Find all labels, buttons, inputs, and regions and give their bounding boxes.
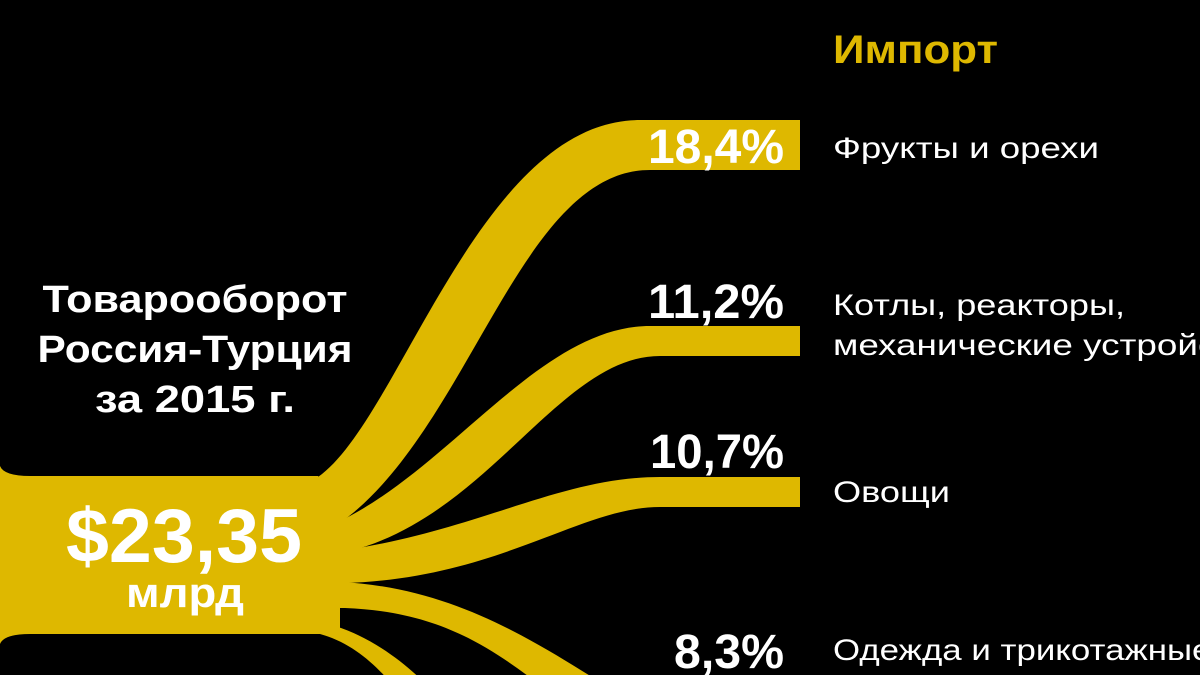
flow: bottom band xyxy=(320,626,440,675)
title text: за 2015 г. xyxy=(95,379,295,421)
flow: clothing xyxy=(330,582,630,675)
total value xyxy=(66,494,302,616)
total value: млрд xyxy=(126,569,244,616)
percentages: 18,4% xyxy=(648,121,784,174)
category labels xyxy=(833,132,1200,667)
category labels: Фрукты и орехи xyxy=(833,132,1099,165)
percentages: 11,2% xyxy=(648,276,784,329)
percentages xyxy=(648,121,784,675)
heading: import: Импорт xyxy=(833,28,998,72)
category labels: Котлы, реакторы, xyxy=(833,289,1125,322)
title text: Товарооборот xyxy=(42,279,348,321)
main trunk bar xyxy=(0,466,340,644)
flow: fruits and nuts xyxy=(318,120,800,523)
percentages: 10,7% xyxy=(650,426,784,479)
category labels: механические устройства xyxy=(833,329,1200,362)
category labels: Овощи xyxy=(833,476,950,509)
flow: vegetables xyxy=(330,477,800,583)
title text: Россия-Турция xyxy=(38,329,352,371)
total value: $23,35 xyxy=(66,494,302,579)
flow: boilers reactors xyxy=(330,326,800,551)
title text xyxy=(38,279,352,421)
